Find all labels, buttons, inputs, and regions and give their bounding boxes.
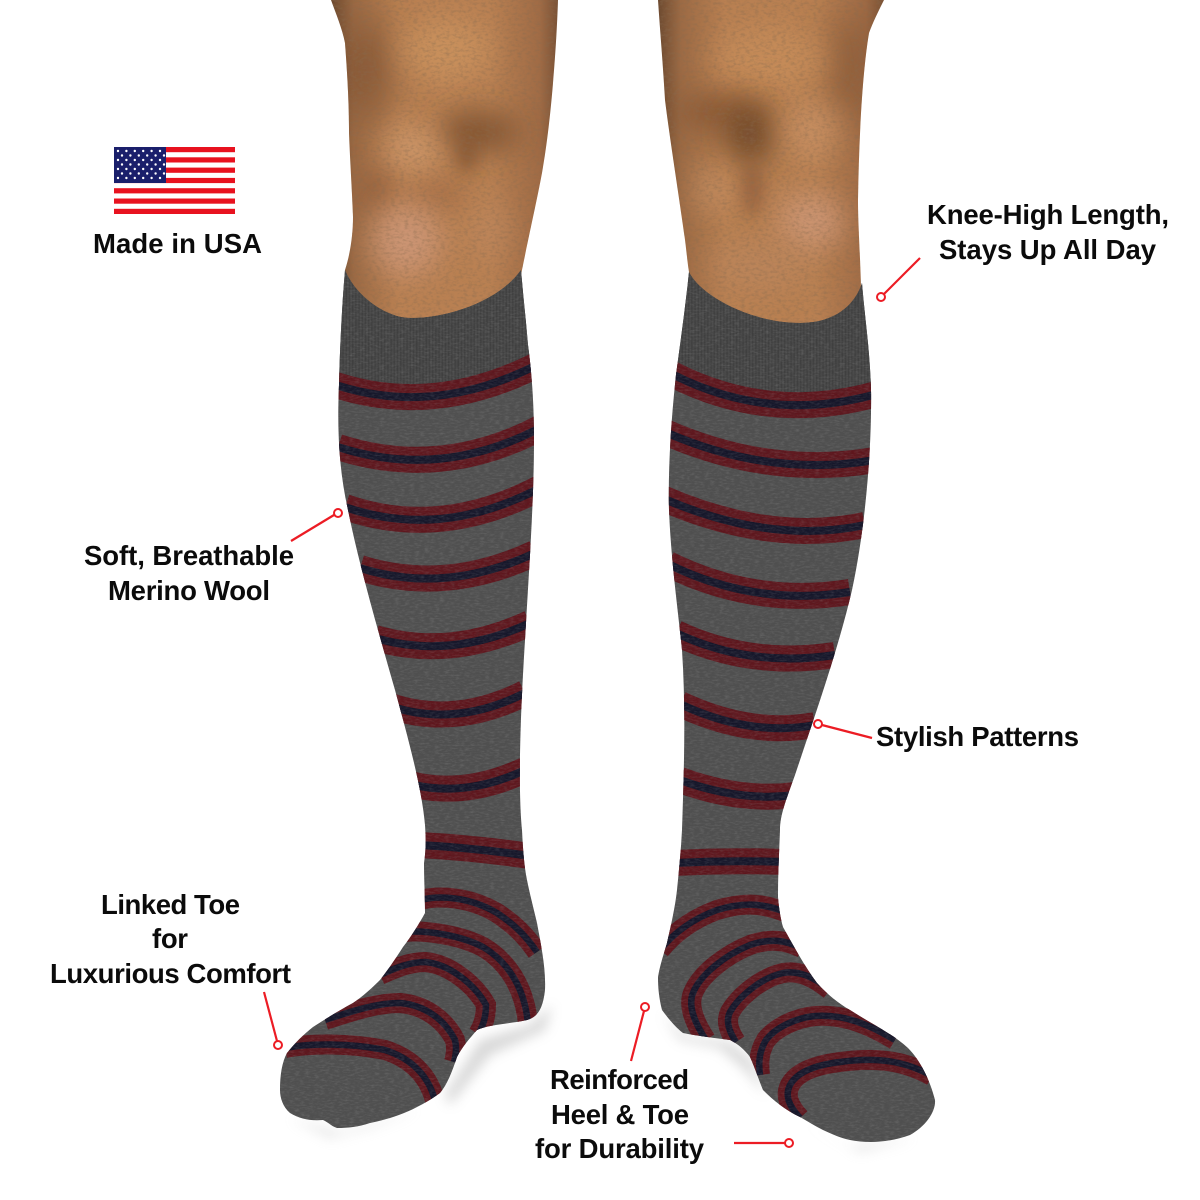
callout: linked toe: Linked Toe	[101, 889, 240, 920]
icon: American flag	[114, 147, 235, 214]
callout: linked toe	[50, 889, 291, 1049]
right sock cuff	[676, 272, 872, 396]
callout: reinforced heel and toe	[535, 1003, 793, 1164]
callout: reinforced heel and toe: for Durability	[535, 1133, 705, 1164]
leg hair texture	[330, 0, 886, 330]
right leg	[658, 0, 884, 330]
left sock	[280, 270, 546, 1128]
callout: stylish patterns: Stylish Patterns	[876, 721, 1079, 752]
label: Made in USA: Made in USA	[93, 228, 262, 259]
right sock stripes	[660, 373, 932, 1118]
right sock	[658, 272, 936, 1142]
callout: knee-high length	[877, 199, 1169, 301]
callout: reinforced heel and toe: Heel & Toe	[551, 1099, 689, 1130]
callout: reinforced heel and toe: Reinforced	[550, 1064, 689, 1095]
callout: merino wool: Merino Wool	[108, 575, 270, 606]
callout: linked toe: for	[152, 923, 188, 954]
callout: merino wool	[84, 509, 342, 606]
callout: knee-high length: Stays Up All Day	[939, 234, 1157, 265]
callout: merino wool: Soft, Breathable	[84, 540, 294, 571]
callout: knee-high length: Knee-High Length,	[927, 199, 1169, 230]
left sock stripes	[285, 366, 540, 1105]
floor shadows	[290, 1005, 915, 1152]
callout: linked toe: Luxurious Comfort	[50, 958, 291, 989]
left leg	[331, 0, 558, 330]
left sock cuff	[339, 270, 531, 380]
